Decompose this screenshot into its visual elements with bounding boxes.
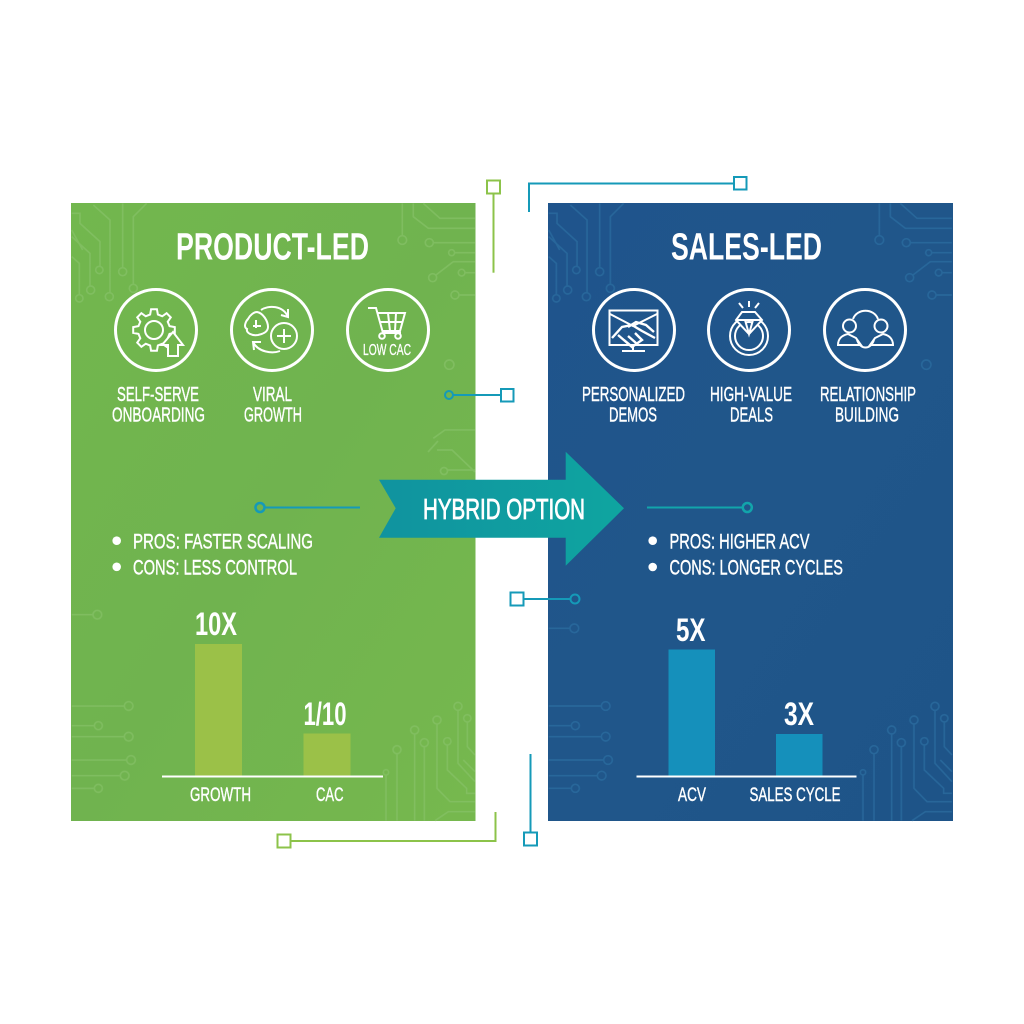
connector: green bottom <box>278 812 496 848</box>
connector: right pros node <box>647 503 752 512</box>
label: viral growth: VIRAL <box>253 384 292 406</box>
icon: viral growth <box>232 290 312 370</box>
arrow: hybrid option <box>379 452 624 566</box>
icon: relationship building people <box>824 290 906 370</box>
heading: product-led: PRODUCT-LED <box>176 226 369 268</box>
connector: blue bottom <box>524 754 537 846</box>
label: personalized demos: DEMOS <box>609 404 657 426</box>
bar chart: product-led <box>162 606 383 806</box>
label: high-value deals: DEALS <box>730 404 773 426</box>
label: personalized demos <box>582 384 685 426</box>
connector: middle lower node <box>510 592 580 606</box>
icon: self-serve gear with up arrow <box>116 290 196 370</box>
bar chart: product-led: CAC <box>316 784 344 806</box>
label: relationship building: RELATIONSHIP <box>820 384 916 406</box>
label: high-value deals: HIGH-VALUE <box>710 384 792 406</box>
bar chart: product-led: 10X <box>195 606 237 642</box>
bar chart: sales-led: SALES CYCLE <box>750 784 840 806</box>
circuit traces: product-led background <box>72 203 475 821</box>
text: low cac: LOW CAC <box>363 342 411 359</box>
text: hybrid option: HYBRID OPTION <box>423 494 585 526</box>
bar chart: product-led: 1/10 <box>304 696 346 732</box>
list: product-led pros and cons: CONS: LESS CONTROL <box>133 556 297 579</box>
circuit traces: sales-led background <box>549 203 952 821</box>
panel: sales-led <box>548 203 953 821</box>
icon: diamond ring <box>708 290 790 370</box>
connector: green top <box>487 180 500 273</box>
connector: blue top <box>529 177 746 212</box>
list: sales-led pros and cons: CONS: LONGER CYCLES <box>670 556 843 579</box>
label: high-value deals <box>710 384 792 426</box>
list: sales-led pros and cons: PROS: HIGHER ACV <box>670 530 810 553</box>
label: self-serve onboarding <box>112 384 205 426</box>
label: viral growth: GROWTH <box>244 404 302 426</box>
bar chart: sales-led: 3X <box>784 696 815 732</box>
connector: left pros node <box>256 503 360 512</box>
panel: product-led <box>71 203 476 821</box>
label: relationship building: BUILDING <box>835 404 899 426</box>
label: self-serve onboarding: ONBOARDING <box>112 404 205 426</box>
label: personalized demos: PERSONALIZED <box>582 384 685 406</box>
label: relationship building <box>820 384 916 426</box>
icon: monitor with handshake <box>594 290 674 370</box>
bar chart: sales-led: 5X <box>676 612 706 648</box>
bar chart: product-led: GROWTH <box>190 784 251 806</box>
list: product-led pros and cons <box>112 530 313 579</box>
label: viral growth <box>244 384 302 426</box>
label: self-serve onboarding: SELF-SERVE <box>117 384 199 406</box>
connector: left panel node <box>445 389 514 402</box>
heading: sales-led: SALES-LED <box>671 226 822 268</box>
list: product-led pros and cons: PROS: FASTER SCALING <box>133 530 313 553</box>
bar chart: sales-led <box>636 612 856 806</box>
bar chart: sales-led: ACV <box>678 784 706 806</box>
icon: shopping cart low cac <box>348 290 428 370</box>
list: sales-led pros and cons <box>648 530 843 579</box>
